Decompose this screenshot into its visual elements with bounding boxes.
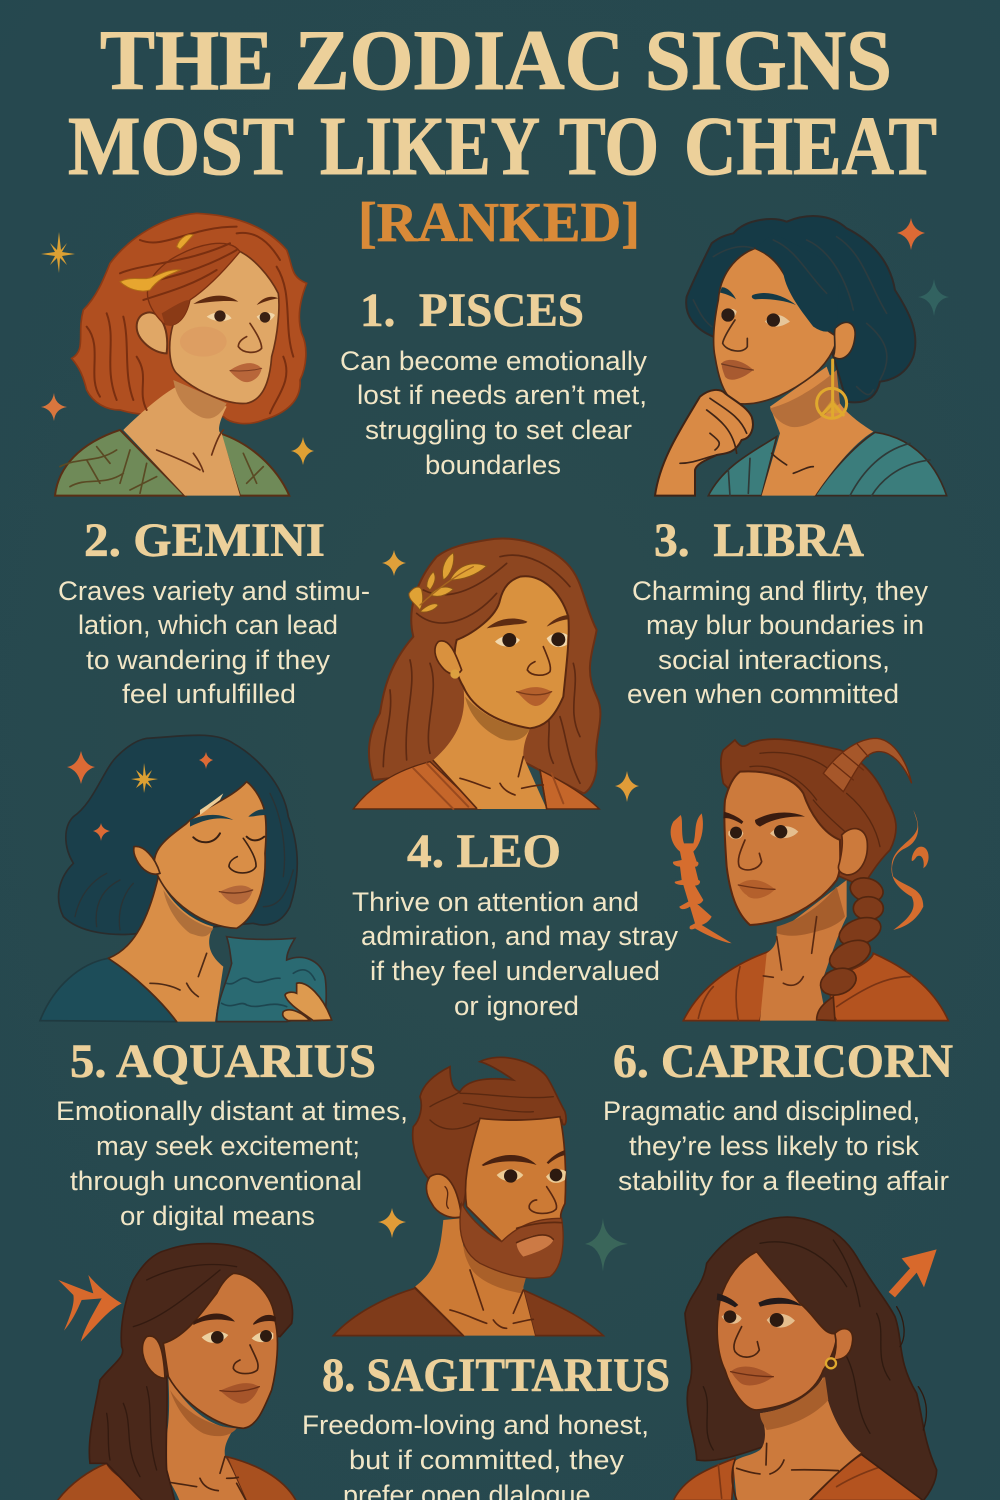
text: Leo description (352, 887, 679, 1021)
text: Pisces description (340, 346, 648, 480)
text: Gemini description: lation, which can lead (78, 610, 338, 640)
text: Libra description: even when committed (627, 679, 899, 709)
text: Leo description: or ignored (454, 991, 579, 1021)
title: MOST (68, 100, 294, 193)
star: gold small (291, 437, 314, 465)
star: orange (897, 218, 925, 250)
heading: 3 Libra: 3. LIBRA (654, 514, 864, 567)
subtitle: ranked: [RANKED] (358, 192, 640, 254)
text: Capricorn description: stability for a fleeting affair (618, 1166, 949, 1196)
star: gold lower right (615, 771, 639, 802)
text: Leo description: Thrive on attention and (352, 887, 639, 917)
text: Libra description: Charming and flirty, they (632, 576, 929, 606)
text: Capricorn description: Pragmatic and disciplined, (603, 1096, 920, 1126)
text: Pisces description: boundarles (425, 450, 561, 480)
text: Pisces description: lost if needs aren’t met, (357, 380, 647, 410)
text: Sagittarius description: Freedom-loving and honest, (302, 1410, 649, 1440)
portrait: Pisces woman with red hair (55, 213, 307, 496)
portrait: Sagittarius woman, left (57, 1244, 297, 1500)
text: Gemini description: Craves variety and stimu- (58, 576, 370, 606)
heading: 4 Leo: 4. LEO (407, 825, 561, 878)
star: faded teal (918, 279, 949, 316)
text: Aquarius description: or digital means (120, 1201, 315, 1231)
title: THE ZODIAC SIGNS (100, 12, 892, 108)
star: gold (378, 1208, 406, 1238)
text: Capricorn description: they’re less likely to risk (629, 1131, 919, 1161)
text: Aquarius description: through unconventional (70, 1166, 362, 1196)
heading: 2 Gemini: 2. GEMINI (84, 514, 325, 567)
title: TO (559, 100, 659, 193)
heading: 1 Pisces: 1. PISCES (360, 284, 584, 337)
star: gold left of Libra portrait (382, 550, 406, 576)
text: Capricorn description (603, 1096, 949, 1196)
text: Sagittarius description (302, 1410, 649, 1500)
heading: 8 Sagittarius: 8. SAGITTARIUS (322, 1349, 670, 1402)
text: Pisces description: struggling to set clear (365, 415, 632, 445)
title (68, 12, 937, 193)
star: orange large (67, 751, 95, 784)
heading: 6 Capricorn: 6. CAPRICORN (613, 1035, 953, 1088)
title: CHEAT (684, 100, 937, 193)
text: Gemini description: to wandering if they (86, 645, 331, 675)
text: Pisces description: Can become emotionally (340, 346, 648, 376)
portrait: Gemini woman with laurel (353, 539, 600, 809)
portrait: bearded man (333, 1057, 603, 1336)
portrait: Aquarius woman with vase (40, 735, 332, 1022)
text: Libra description (627, 576, 929, 709)
text: Leo description: admiration, and may stray (361, 921, 679, 951)
star: orange small left (93, 823, 110, 841)
portrait: woman with peace earring (655, 216, 947, 496)
text: Gemini description: feel unfulfilled (122, 679, 296, 709)
text: Gemini description (58, 576, 370, 709)
portrait: Sagittarius woman, right with arrow (673, 1217, 937, 1500)
text: Leo description: if they feel undervalued (370, 956, 660, 986)
star: gold burst in hair (131, 763, 158, 793)
star: gold burst (41, 232, 75, 273)
text: Sagittarius description: but if committed, they (349, 1445, 625, 1475)
text: Aquarius description (56, 1096, 408, 1231)
title: LIKEY (320, 100, 540, 193)
star: orange small right (199, 752, 213, 769)
portrait: Capricorn woman with horn and braid (671, 738, 948, 1021)
text: Libra description: social interactions, (658, 645, 890, 675)
star: faded green (585, 1218, 628, 1272)
heading: 5 Aquarius: 5. AQUARIUS (70, 1035, 376, 1088)
text: Aquarius description: may seek excitement; (96, 1131, 360, 1161)
text: Libra description: may blur boundaries in (646, 610, 924, 640)
text: Aquarius description: Emotionally distant at times, (56, 1096, 408, 1126)
star: orange small (41, 393, 67, 421)
